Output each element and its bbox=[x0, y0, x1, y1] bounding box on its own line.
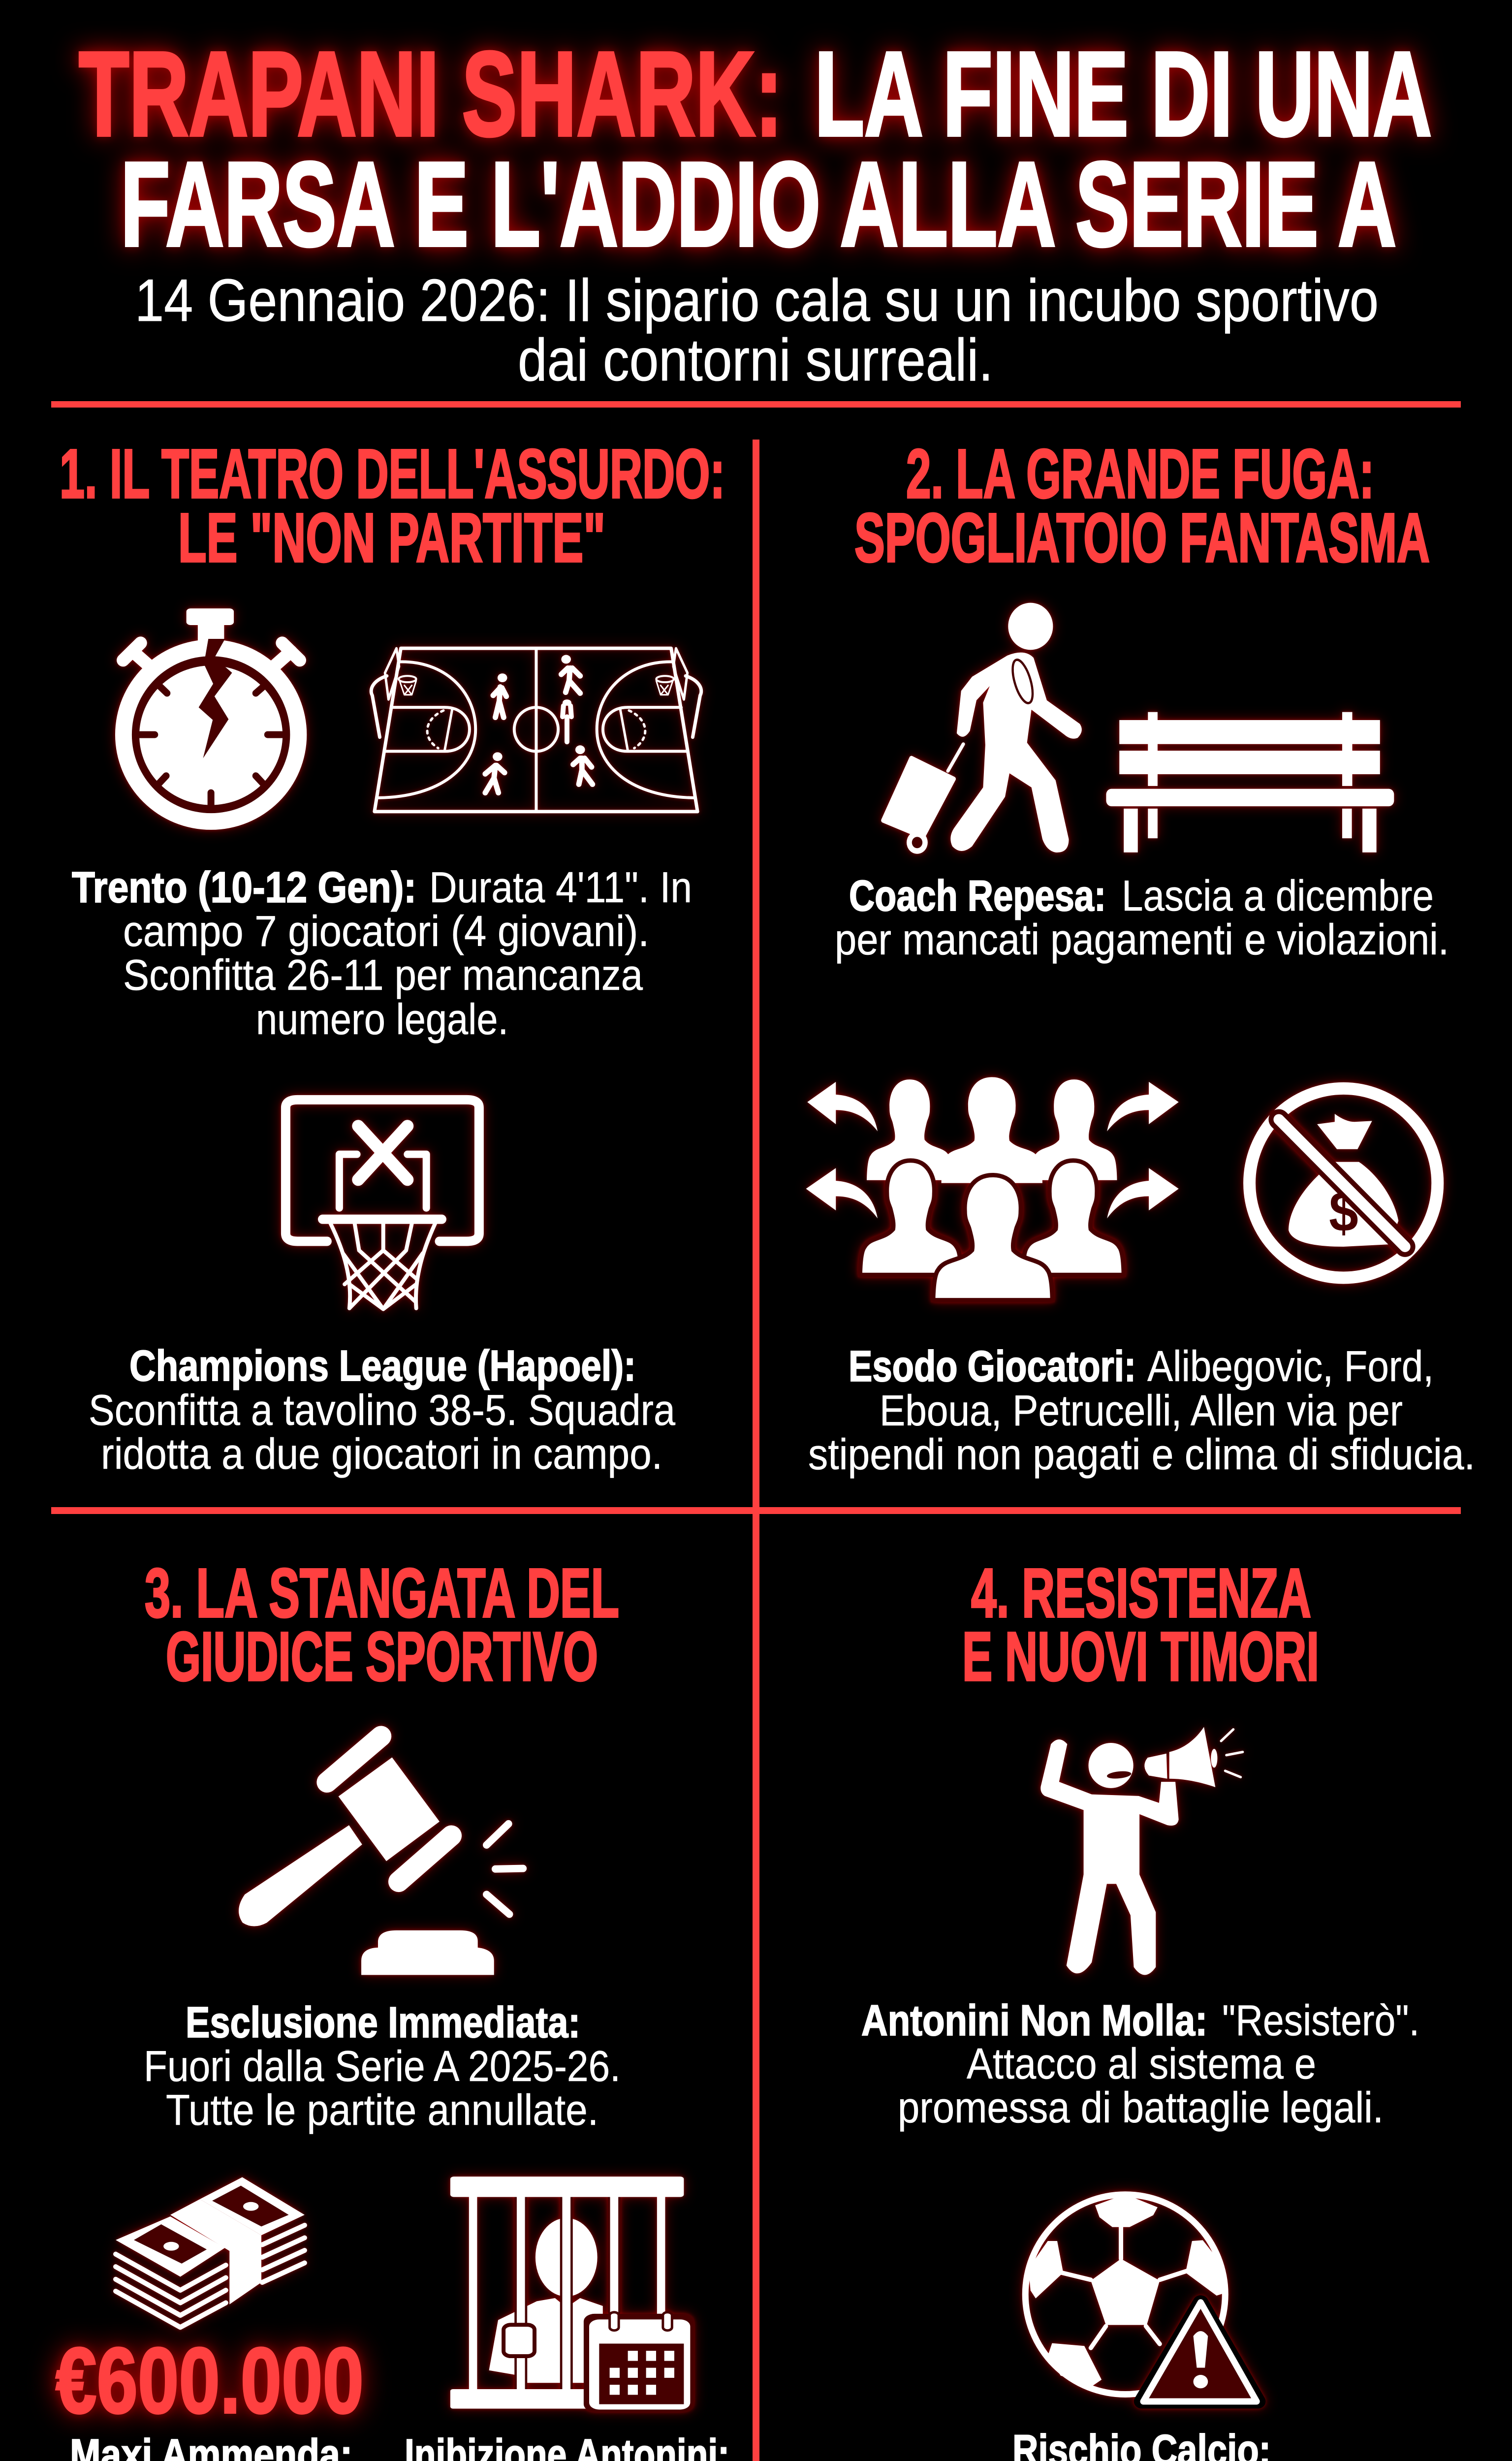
heading: section 4 bbox=[962, 1554, 1319, 1695]
title: TRAPANI SHARK: bbox=[79, 27, 783, 161]
panel: section 3 bbox=[56, 1554, 729, 2461]
subtitle: dai contorni surreali. bbox=[518, 326, 993, 393]
subtitle bbox=[135, 267, 1379, 393]
text: Trento bbox=[72, 863, 692, 1043]
panel: section 2 bbox=[806, 435, 1475, 1479]
panel: section 4 bbox=[861, 1554, 1419, 2461]
text: Esodo Giocatori: Eboua, Petrucelli, Allen via per bbox=[880, 1386, 1403, 1435]
icon: no money: $ bbox=[1329, 1180, 1358, 1243]
text: Antonini Non Molla: Attacco al sistema e bbox=[967, 2039, 1316, 2088]
icon: broken stopwatch bbox=[115, 608, 307, 830]
text: Antonini Non Molla: promessa di battaglie legali. bbox=[898, 2083, 1384, 2132]
icon: soccer ball with warning bbox=[1025, 2194, 1258, 2401]
text: Esclusione Immediata: Tutte le partite annullate. bbox=[166, 2085, 598, 2134]
heading: section 1: LE "NON PARTITE" bbox=[178, 499, 605, 576]
icon: no money bbox=[1250, 1088, 1438, 1278]
text: Champions League: Champions League (Hapoel): bbox=[129, 1341, 636, 1390]
text: Esodo Giocatori bbox=[808, 1342, 1475, 1479]
figure: 600.000 euro fine: €600.000 bbox=[56, 2329, 364, 2433]
heading: section 3: 3. LA STANGATA DEL bbox=[145, 1554, 619, 1632]
text: Antonini Non Molla: Antonini Non Molla: bbox=[861, 1996, 1207, 2045]
icon: players leaving bbox=[806, 1077, 1179, 1300]
text: Esclusione Immediata bbox=[144, 1998, 621, 2134]
heading: section 1: 1. IL TEATRO DELL'ASSURDO: bbox=[60, 435, 725, 512]
text: Antonini Non Molla: "Resisterò". bbox=[1222, 1996, 1419, 2045]
text: Antonini Non Molla bbox=[861, 1996, 1419, 2132]
panel: section 1 bbox=[60, 435, 725, 1478]
text: Champions League: Sconfitta a tavolino 38-5. Squadra bbox=[89, 1386, 675, 1434]
text: Esodo Giocatori: Esodo Giocatori: bbox=[849, 1342, 1136, 1390]
text: Trento: Sconfitta 26-11 per mancanza bbox=[123, 950, 643, 999]
icon: man with megaphone bbox=[1040, 1727, 1243, 1975]
text: Esodo Giocatori: Alibegovic, Ford, bbox=[1147, 1342, 1434, 1390]
heading: section 1 bbox=[60, 435, 725, 576]
icon: basket with X bbox=[285, 1100, 479, 1309]
text: Coach Repesa: Lascia a dicembre bbox=[1122, 871, 1434, 920]
icon: basketball court bbox=[371, 648, 701, 812]
text: Champions League: ridotta a due giocatori in campo. bbox=[101, 1429, 662, 1478]
text: Coach Repesa: per mancati pagamenti e violazioni. bbox=[835, 915, 1449, 964]
text: Coach Repesa bbox=[835, 871, 1449, 964]
text: Trento: Trento (10-12 Gen): bbox=[72, 863, 416, 912]
icon: gavel bbox=[239, 1736, 523, 1975]
icon: walker with suitcase bbox=[883, 603, 1082, 854]
text: Esclusione Immediata: Esclusione Immediata: bbox=[186, 1998, 580, 2047]
heading: section 3: GIUDICE SPORTIVO bbox=[166, 1617, 598, 1695]
text: Trento: Durata 4'11". In bbox=[429, 863, 692, 912]
text: Coach Repesa: Coach Repesa: bbox=[849, 871, 1106, 920]
heading: section 2 bbox=[854, 435, 1430, 576]
text: Esclusione Immediata: Fuori dalla Serie A 2025-26. bbox=[144, 2042, 621, 2090]
heading: section 3 bbox=[145, 1554, 619, 1695]
text: Trento: campo 7 giocatori (4 giovani). bbox=[123, 907, 649, 955]
heading: section 4: 4. RESISTENZA bbox=[971, 1554, 1311, 1632]
icon: stack of money bbox=[116, 2177, 305, 2327]
icon: bench bbox=[1106, 712, 1394, 852]
title bbox=[79, 27, 1432, 271]
icon: prisoner behind bars with calendar bbox=[450, 2177, 694, 2412]
text: Trento: numero legale. bbox=[256, 995, 508, 1043]
text: Champions League bbox=[89, 1341, 675, 1478]
heading: section 4: E NUOVI TIMORI bbox=[962, 1617, 1319, 1695]
